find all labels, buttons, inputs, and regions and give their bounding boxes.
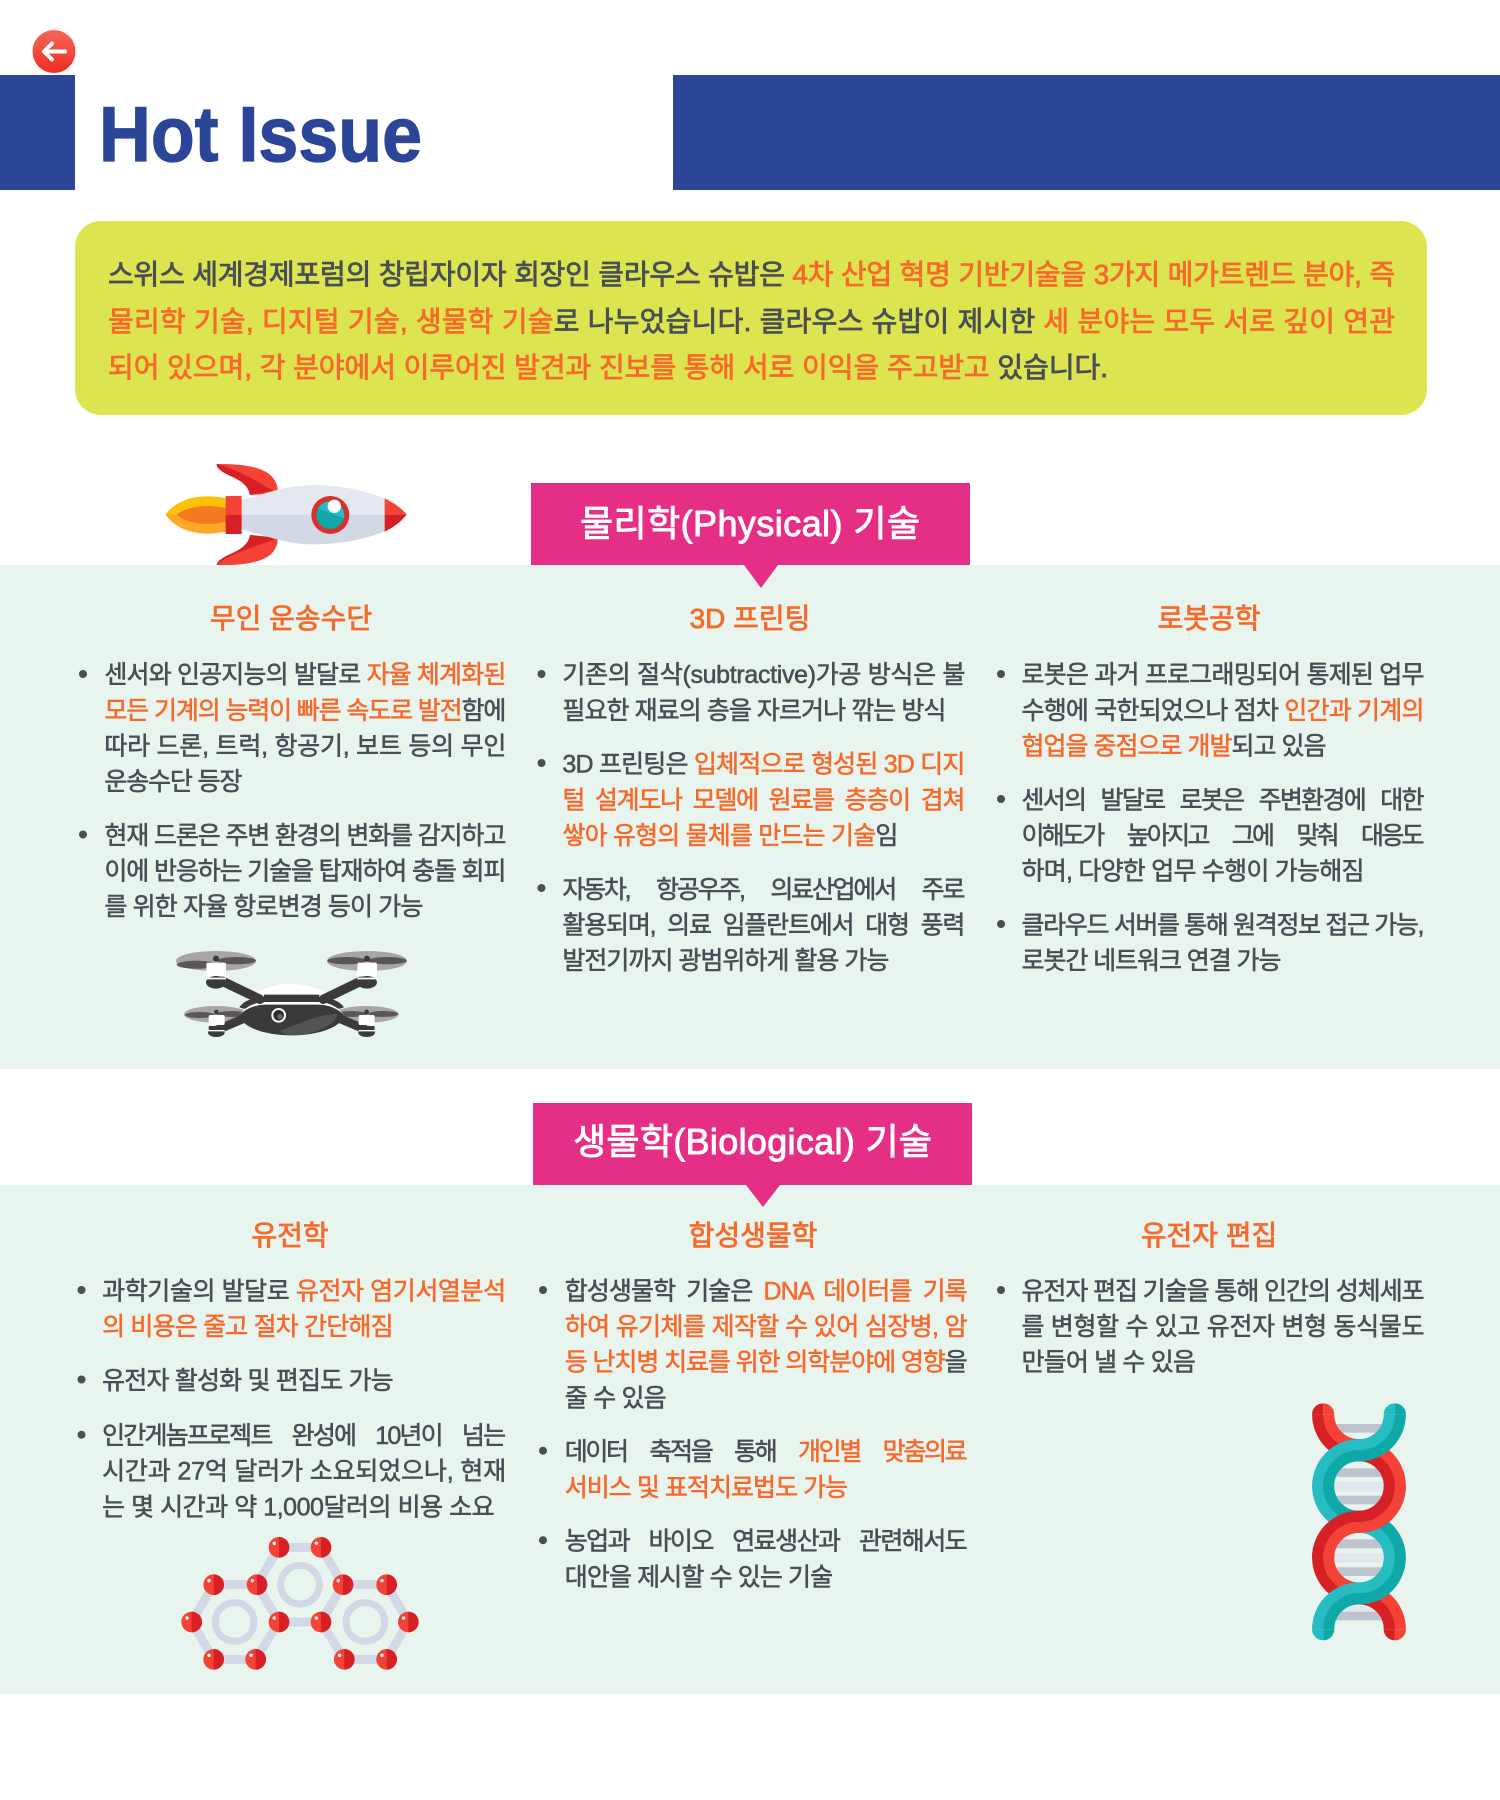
body text: 합성생물학 기술은 DNA 데이터를 기록 [565, 1278, 968, 1306]
column: 3D printing [538, 603, 965, 975]
body text [562, 661, 965, 975]
section banner: biological: 생물학(Biological) 기술 [573, 1121, 932, 1162]
body text: 시간과 27억 달러가 소요되었으나, 현재 [102, 1458, 506, 1486]
heading: 유전학 [251, 1220, 329, 1251]
bullets [538, 670, 546, 892]
header band left [0, 75, 75, 190]
bullets [997, 670, 1005, 928]
body text: 클라우드 서버를 통해 원격정보 접근 가능, [1022, 911, 1424, 939]
body text: 발전기까지 광범위하게 활용 가능 [562, 947, 889, 975]
body text: 데이터 축적을 통해 개인별 맞춤의료 [565, 1438, 968, 1466]
column: synthetic biology [539, 1220, 968, 1591]
body text: 서비스 및 표적치료법도 가능 [565, 1474, 848, 1502]
body text: 운송수단 등장 [104, 768, 242, 796]
body text: 센서와 인공지능의 발달로 자율 체계화된 [104, 661, 506, 689]
heading: 합성생물학 [689, 1220, 817, 1251]
body text: 자동차, 항공우주, 의료산업에서 주로 [562, 876, 965, 904]
icon: drone [176, 951, 407, 1037]
body text: 를 위한 자율 항로변경 등이 가능 [104, 893, 423, 921]
icon: rocket [166, 464, 407, 565]
intro text [108, 259, 1395, 383]
body text: 현재 드론은 주변 환경의 변화를 감지하고 [104, 822, 506, 850]
heading: 로봇공학 [1157, 603, 1261, 634]
body text: 이에 반응하는 기술을 탑재하여 충돌 회피 [104, 858, 506, 886]
body text [102, 1278, 506, 1521]
body text: 과학기술의 발달로 유전자 염기서열분석 [102, 1278, 506, 1306]
body text: 유전자 활성화 및 편집도 가능 [102, 1367, 394, 1395]
body text: 협업을 중점으로 개발되고 있음 [1022, 732, 1326, 760]
body text: 는 몇 시간과 약 1,000달러의 비용 소요 [102, 1493, 495, 1521]
body text: 유전자 편집 기술을 통해 인간의 성체세포 [1022, 1278, 1424, 1306]
column: unmanned vehicles [79, 603, 506, 921]
column: robotics [997, 603, 1424, 975]
body text: 모든 기계의 능력이 빠른 속도로 발전함에 [104, 697, 506, 725]
body text: 털 설계도나 모델에 원료를 층층이 겹쳐 [562, 786, 965, 814]
body text: 따라 드론, 트럭, 항공기, 보트 등의 무인 [104, 732, 506, 760]
body text: 센서의 발달로 로봇은 주변환경에 대한 [1022, 786, 1424, 814]
heading: 무인 운송수단 [210, 603, 372, 634]
bullet [997, 1286, 1005, 1294]
body text: 기존의 절삭(subtractive)가공 방식은 불 [562, 661, 965, 689]
column: gene editing [997, 1220, 1424, 1377]
body text: 농업과 바이오 연료생산과 관련해서도 [565, 1528, 968, 1556]
intro text: 물리학 기술, 디지털 기술, 생물학 기술로 나누었습니다. 클라우스 슈밥이 제시한 세 분야는 모두 서로 깊이 연관 [108, 306, 1395, 337]
title: Hot Issue [99, 90, 422, 178]
section banner: biological [533, 1103, 972, 1207]
bullets [539, 1286, 547, 1544]
body text: 3D 프린팅은 입체적으로 형성된 3D 디지 [562, 751, 965, 779]
icon: DNA helix [1312, 1403, 1406, 1640]
body text: 쌓아 유형의 물체를 만드는 기술임 [562, 822, 898, 850]
body text: 의 비용은 줄고 절차 간단해짐 [102, 1313, 394, 1341]
body text: 등 난치병 치료를 위한 의학분야에 영향을 [565, 1349, 968, 1377]
bullets [79, 670, 87, 838]
bullets [78, 1286, 86, 1439]
body text: 수행에 국한되었으나 점차 인간과 기계의 [1022, 697, 1424, 725]
header band right [673, 75, 1500, 190]
heading: 3D 프린팅 [690, 603, 810, 634]
panel: intro callout [75, 221, 1427, 415]
body text: 로봇은 과거 프로그래밍되어 통제된 업무 [1022, 661, 1424, 689]
body text [565, 1278, 968, 1591]
body text: 만들어 낼 수 있음 [1022, 1349, 1196, 1377]
body text [1022, 1278, 1424, 1377]
body text: 를 변형할 수 있고 유전자 변형 동식물도 [1022, 1313, 1424, 1341]
heading: 유전자 편집 [1141, 1220, 1277, 1251]
body text: 줄 수 있음 [565, 1384, 667, 1412]
intro text: 되어 있으며, 각 분야에서 이루어진 발견과 진보를 통해 서로 이익을 주고받고 있습니다. [108, 352, 1108, 383]
body text: 인간게놈프로젝트 완성에 10년이 넘는 [102, 1422, 506, 1450]
body text: 이해도가 높아지고 그에 맞춰 대응도 [1022, 822, 1424, 850]
icon: back arrow button [32, 30, 76, 73]
body text [1022, 661, 1424, 975]
body text: 활용되며, 의료 임플란트에서 대형 풍력 [562, 911, 965, 939]
section banner: physical: 물리학(Physical) 기술 [580, 503, 920, 544]
section banner: physical [531, 483, 970, 588]
icon: molecule [181, 1537, 419, 1670]
body text: 하며, 다양한 업무 수행이 가능해짐 [1022, 858, 1364, 886]
body text: 필요한 재료의 층을 자르거나 깎는 방식 [562, 697, 946, 725]
body text: 로봇간 네트워크 연결 가능 [1022, 947, 1282, 975]
body text: 대안을 제시할 수 있는 기술 [565, 1563, 833, 1591]
panel: biological technology [0, 1185, 1500, 1694]
panel: physical technology [0, 565, 1500, 1069]
body text: 하여 유기체를 제작할 수 있어 심장병, 암 [565, 1313, 968, 1341]
column: genetics [78, 1220, 506, 1521]
intro text: 스위스 세계경제포럼의 창립자이자 회장인 클라우스 슈밥은 4차 산업 혁명 기반기술을 3가지 메가트렌드 분야, 즉 [108, 259, 1395, 290]
body text [104, 661, 506, 921]
